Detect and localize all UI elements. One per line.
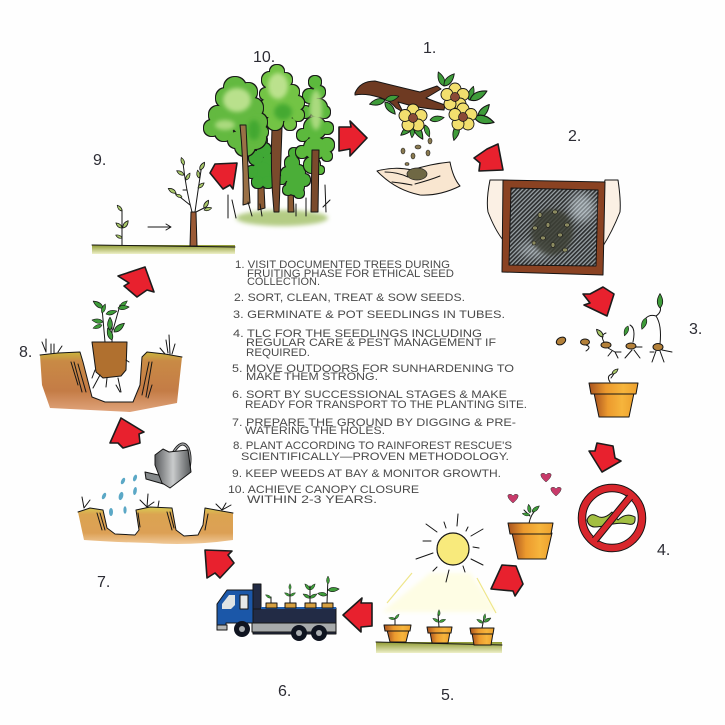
- illustration: step 9 seedling growing to sapling: [92, 157, 235, 254]
- illustration: step 2 sieve with seeds: [487, 180, 620, 275]
- text block: ten step list: 7. PREPARE THE GROUND BY DIGGING & PRE-: [232, 417, 516, 429]
- label: 8.: 8.: [19, 344, 32, 361]
- illustration: step 7 prepared holes in soil: [78, 494, 233, 544]
- text block: ten step list: MAKE THEM STRONG.: [246, 371, 378, 383]
- text block: ten step list: WATERING THE HOLES.: [245, 425, 385, 437]
- label: 2.: 2.: [568, 128, 581, 145]
- label: 1.: 1.: [423, 40, 436, 57]
- arrow: 2 to 3: [583, 287, 614, 316]
- text block: ten step list: READY FOR TRANSPORT TO THE PLANTING SITE.: [245, 399, 527, 411]
- text block: ten step list: 1. VISIT DOCUMENTED TREES DURING: [235, 259, 450, 271]
- text block: ten step list: 9. KEEP WEEDS AT BAY & MONITOR GROWTH.: [232, 468, 501, 480]
- illustration: step 6 truck carrying seedlings: [217, 576, 339, 641]
- arrow: 8 to 9: [118, 267, 154, 297]
- text block: ten step list: 2. SORT, CLEAN, TREAT & SOW SEEDS.: [234, 292, 465, 304]
- text block: ten step list: 8. PLANT ACCORDING TO RAINFOREST RESCUE'S: [233, 440, 512, 452]
- arrow: 3 to 4: [589, 443, 621, 472]
- text block: ten step list: SCIENTIFICALLY—PROVEN METHODOLOGY.: [241, 451, 509, 463]
- text block: ten step list: COLLECTION.: [247, 276, 320, 288]
- illustration: step 5 sun and sun-hardening pots: [376, 514, 502, 653]
- label: 3.: 3.: [689, 321, 702, 338]
- text block: ten step list: WITHIN 2-3 YEARS.: [247, 494, 377, 506]
- illustration: watering can with water drops: [101, 444, 191, 516]
- text block: ten step list: REQUIRED.: [246, 347, 310, 359]
- text block: ten step list: FRUITING PHASE FOR ETHICAL SEED: [247, 268, 454, 280]
- illustration: step 1 flowering branch, seeds and hand: [355, 71, 495, 195]
- text block: ten step list: 10. ACHIEVE CANOPY CLOSURE: [228, 484, 419, 496]
- arrow: 6 to 7: [205, 550, 234, 578]
- text block: ten step list: 4. TLC FOR THE SEEDLINGS INCLUDING: [233, 328, 482, 340]
- label: 6.: 6.: [278, 683, 291, 700]
- arrow: 10 to 9: [210, 163, 237, 189]
- text block: ten step list: REGULAR CARE & PEST MANAGEMENT IF: [246, 337, 496, 349]
- label: 4.: 4.: [657, 542, 670, 559]
- label: 9.: 9.: [93, 152, 106, 169]
- text block: ten step list: 6. SORT BY SUCCESSIONAL STAGES & MAKE: [232, 389, 507, 401]
- arrow: 1 to 2: [474, 144, 503, 171]
- text block: ten step list: 3. GERMINATE & POT SEEDLINGS IN TUBES.: [233, 309, 505, 321]
- label: 5.: 5.: [441, 687, 454, 704]
- illustration: step 4 pest prohibition sign: [582, 488, 642, 548]
- arrow: 10 to 1: [339, 121, 367, 156]
- arrow: 4 to 5: [491, 565, 523, 596]
- illustration: step 10 canopy forest: [204, 65, 334, 226]
- arrow: 5 to 6: [343, 598, 372, 632]
- illustration: step 3 germination stages and potted seedling: [555, 294, 672, 417]
- illustration: step 4 potted seedling with hearts: [508, 473, 561, 559]
- label: 7.: 7.: [97, 574, 110, 591]
- text block: ten step list: 5. MOVE OUTDOORS FOR SUNHARDENING TO: [232, 363, 515, 375]
- label: 10.: 10.: [253, 49, 275, 66]
- arrow: 7 to 8: [110, 418, 144, 448]
- text block: ten step list: [228, 259, 527, 506]
- illustration: step 8 planting in a hole: [40, 299, 182, 412]
